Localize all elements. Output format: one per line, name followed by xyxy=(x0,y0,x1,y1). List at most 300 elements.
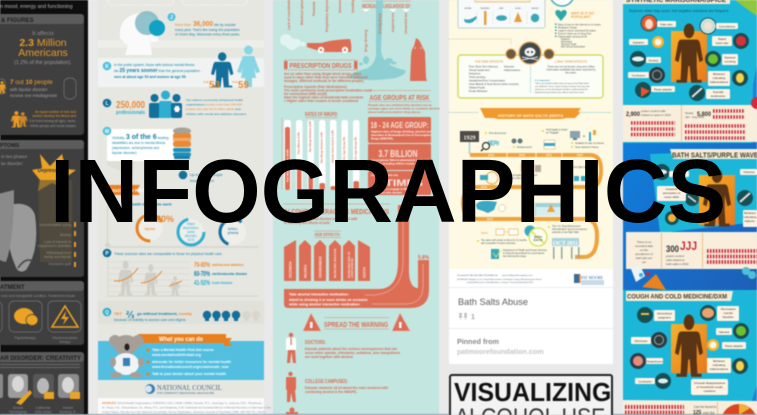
text: prescription description: dosages, different methods or for different people). xyxy=(284,79,364,83)
why is it so popular: Legal in some countries/US states xyxy=(558,30,597,32)
icon: lightning warning xyxy=(52,306,78,327)
stat P: comparison chart: heart disease xyxy=(212,281,233,285)
stat strip: spice calls: Jan - Aug 2011 xyxy=(685,115,705,119)
timeline lower items: ban banning the drugs. xyxy=(503,255,527,258)
stat L: professionals: Our nation's community behavioral health xyxy=(186,98,243,102)
stat N: treatment: Up to 80% of people xyxy=(190,173,223,177)
side effects box: Teeth grinding xyxy=(469,75,486,79)
stat strip: bath salt calls xyxy=(626,232,757,269)
symptom list: family and friends xyxy=(44,255,71,259)
stat J: suicide: More than xyxy=(175,23,191,27)
red phone icon rows xyxy=(631,111,746,138)
sources: United States. Results from the National Comorbidity Survey Replication. American Journal of Psychiatry 2008, 165:703-711 | World xyxy=(102,410,266,414)
why is it so popular: Shaved Head xyxy=(561,43,577,46)
symptom labels xyxy=(628,21,738,99)
symptom labels: indicating xyxy=(744,215,757,219)
icon: head with circles xyxy=(120,11,165,55)
side effect labels: INCREASED RISK OF xyxy=(347,251,351,278)
routes of use box: snort xyxy=(515,7,521,10)
side effect labels: LIVER DAMAGE xyxy=(350,258,354,278)
section: symptoms: re two phases xyxy=(1,154,27,159)
partial figure xyxy=(286,408,298,415)
rotated outcomes list: Impaired sex xyxy=(391,12,395,32)
icon: health workers xyxy=(149,90,182,118)
stat M: disabilities card xyxy=(103,127,191,178)
stat P: comparison chart: P xyxy=(105,251,109,257)
icon: spilled bottle xyxy=(631,265,756,290)
chart: rates of NMUPD: Non-Binge Drinkers 3.3% xyxy=(320,131,324,163)
portraits xyxy=(0,374,80,405)
side effects box: National Drug Institute note effects with their chem. xyxy=(535,91,585,94)
icon: smoke xyxy=(280,34,306,50)
chart: success rings: bipolar xyxy=(145,227,156,231)
routes of use box: smoke xyxy=(464,7,472,10)
timeline lower items: authority to ban Bath Salts xyxy=(552,231,580,234)
stat M: disabilities card: bipolar disorder) xyxy=(112,151,136,155)
symptom labels: indicating xyxy=(713,363,726,367)
stat Q: two thirds without treatment: ⅔ xyxy=(126,310,134,321)
side effect tabs xyxy=(284,240,370,281)
flow shape: alcohol medication stats: Admit to drinking 3 or more drinks on occasion xyxy=(289,298,368,302)
dotted connector xyxy=(449,39,511,45)
body figure with highlight xyxy=(671,315,707,377)
timeline lower items: BATH xyxy=(534,235,542,239)
chart: success rings xyxy=(105,205,258,248)
heading: spread the warning: SPREAD THE WARNING xyxy=(324,320,388,329)
symptom list: Excessive guilt xyxy=(49,262,71,266)
side effect labels: DROWSINESS xyxy=(318,256,322,278)
body figure with highlight xyxy=(671,23,707,83)
symptom labels: Confusion xyxy=(638,380,652,384)
timeline: history: 1919 xyxy=(488,153,495,157)
chart: success rings: Major xyxy=(187,222,196,226)
symptom labels: Pale skin xyxy=(660,22,673,26)
chart: success rings: schizo- xyxy=(228,227,238,231)
section: treatment: ronic and manageable condition. Treatments include: xyxy=(1,294,76,298)
stat strip: bath salt calls: bath salt use xyxy=(636,256,653,260)
chart: success rings: 80% xyxy=(156,214,174,224)
title: INFOGRAPHICS xyxy=(50,142,726,242)
section: symptoms: PTOMS xyxy=(0,143,20,149)
symptom labels: faculties xyxy=(722,315,734,319)
chart: rates of NMUPD: Past Misuse 8.9% xyxy=(296,132,300,154)
section: facts and figures: (1.2% of the population). xyxy=(14,60,72,66)
heading: increased likelihood: INCREASED LIKELIHOOD OF: xyxy=(362,4,411,10)
stat K: life expectancy band: K xyxy=(105,64,109,70)
rotated outcomes list: Unwanted sex xyxy=(404,12,408,34)
stat L: professionals: 250,000 xyxy=(116,100,145,111)
stat N: treatment: treated recover xyxy=(190,179,215,183)
stat K: life expectancy band: 53 xyxy=(209,80,220,91)
icon: clock xyxy=(550,0,574,6)
why is it so popular: POPULAR? xyxy=(571,15,591,19)
chart: success rings: phrenia xyxy=(228,231,239,235)
timeline: history: 2010 xyxy=(487,217,494,221)
section: facts and figures: Americans xyxy=(18,47,68,59)
stat K: life expectancy band: In the public system, those with serious mental illness xyxy=(114,63,195,67)
symptom labels xyxy=(657,169,757,227)
panel: bath salts abuse pin card xyxy=(449,0,613,364)
section: spice: Euphoric state may occur, but negative reactions are frequent: xyxy=(629,9,729,13)
side effect labels: DIZZINESS xyxy=(288,261,292,278)
section: spice xyxy=(623,0,757,143)
timeline: history xyxy=(460,128,604,259)
heading strip xyxy=(626,291,733,301)
icon: sad face mask xyxy=(7,204,36,272)
stat strip: spice calls: 2,900 xyxy=(626,111,640,118)
college campuses advice: combining alcohol & the NMUPD. xyxy=(305,390,357,394)
symptom labels: Behavior xyxy=(744,211,756,215)
sources: SOURCES | World Health Organization | SAMHSA | CDC | NAMI | NIMH | Kessler, R.C., Heeringa, S., Lakoma, M.D., Petukhova, xyxy=(102,401,262,405)
footer: provider and logo: Provided BY PAT MOORE FOUNDATION xyxy=(457,274,498,277)
section: facts and figures xyxy=(0,14,84,135)
symptom labels: hallucinations xyxy=(710,367,729,371)
text: prescription description: Have the highest rates of accidental fatal overdose xyxy=(284,96,364,100)
symptom list: Anxiety xyxy=(60,233,71,237)
section: creativity: Ernest xyxy=(13,406,23,410)
stat J: suicide: every year. That's like losing the population xyxy=(175,28,240,32)
stat strip: bath salt calls: calls related to xyxy=(666,258,685,262)
section: symptoms: lar disorder: xyxy=(1,161,23,166)
bottom edge line xyxy=(0,414,757,415)
stat strip: bath salt calls: poison control xyxy=(666,254,684,258)
icon: depressive phase star xyxy=(32,154,76,191)
footer: provider and logo: Institute/Research, Food/Nutrition, Listing in Tracking Identified 2011 xyxy=(467,281,534,284)
text: prescription description: used in ways other than they were intended (different xyxy=(284,76,368,80)
heading: alcohol interactive medications: ALCOHOL INTERACTIVE MEDICATIONS xyxy=(284,207,389,216)
text: age groups: abuse with prescription drug abuse. xyxy=(368,110,421,114)
banner: history of bath salts: HISTORY OF BATH SALTS (MEPH) xyxy=(498,113,564,118)
timeline items: Sold legally in Israel xyxy=(546,128,568,132)
side effects box: tolerance can be developed. Studies conducted by the xyxy=(535,88,588,91)
side effects box: Headaches/Poor Concentration xyxy=(469,78,506,82)
why is it so popular: Musicians xyxy=(561,40,573,44)
side effects box: Seizures xyxy=(504,64,515,68)
callout: 18-24 age group: Drugs (NMUPD). xyxy=(371,136,394,140)
symptom labels: medicine xyxy=(703,389,716,393)
timeline items: First discovered xyxy=(489,132,507,135)
logo: national council xyxy=(145,384,222,395)
panel: mental health infographic: health treatments work xyxy=(130,202,172,206)
timeline lower items: SALTS xyxy=(534,238,543,242)
stat P: comparison chart xyxy=(103,249,258,296)
callout: 3.7 billion: in 2009, including million rounds xyxy=(371,162,415,166)
college campuses advice: Educate students 18-24 about the risks involved with xyxy=(305,386,388,390)
symptom labels: tendencies xyxy=(711,94,726,98)
section: bath salts xyxy=(623,143,757,290)
symptom labels: judgment xyxy=(657,316,671,320)
stat M: disabilities card: M xyxy=(105,129,109,135)
symptom list: Withdrawal from xyxy=(46,251,71,255)
timeline lower items: The action will remain in effect for 12 months, xyxy=(481,239,528,242)
routes of use box xyxy=(458,0,545,28)
symptom labels: motor skills xyxy=(664,195,679,199)
symptom labels: hallucin. xyxy=(744,219,756,223)
side effects box: It is important: xyxy=(535,79,550,82)
doctors advice: occur when opioids, stimulants, sedatives, &/or tranquilizers xyxy=(305,351,400,355)
heading: age groups at risk: AGE GROUPS AT RISK xyxy=(370,93,430,102)
icon: spilling liquid xyxy=(349,0,406,80)
heading: alcohol interactive medications xyxy=(283,204,390,225)
side effect labels: NAUSEA xyxy=(304,264,308,278)
symptom labels: Diminished xyxy=(657,312,672,316)
symptom labels: Behavior xyxy=(713,359,725,363)
heading: prescription drugs: PRESCRIPTION DRUGS xyxy=(290,61,352,70)
timeline items xyxy=(476,128,604,216)
doctors advice: are used together with alcohol. xyxy=(305,355,354,359)
section: creativity: Catherine xyxy=(36,406,50,410)
pin title: Bath Salts Abuse xyxy=(458,297,528,307)
section: treatment: Electroconvulsive xyxy=(53,336,78,340)
action list: www.thenationalcouncil.org/cc/advocate_now xyxy=(151,365,229,369)
section: facts and figures: with bipolar disorder xyxy=(10,87,48,92)
symptom labels: Convulsions xyxy=(719,24,736,28)
side effects box: Erratic Behavior xyxy=(469,89,488,93)
panel: what you can do: What you can do xyxy=(159,336,203,343)
chart: rates of NMUPD: Past Binge Drinkers 39.8% xyxy=(286,149,290,182)
stat strip: spice calls: poison control calls xyxy=(641,109,666,113)
callout: 3 times xyxy=(368,171,431,195)
symptom labels xyxy=(631,306,746,395)
stat M: disabilities card: Globally, 3 of the 6 leading xyxy=(112,134,169,141)
stat J: suicide: of Green Bay, Wisconsin every three years. xyxy=(175,32,240,36)
stat J: suicide: die by suicide xyxy=(214,23,236,27)
stat strip: DXM: over the xyxy=(703,411,715,415)
routes of use box: oral xyxy=(499,7,503,10)
symptom list: enjoyment in activities xyxy=(38,244,71,248)
sources xyxy=(98,398,271,415)
panel: bipolar disorder dark infographic xyxy=(0,0,88,415)
side effects box: Poor Short Term Memory xyxy=(469,64,499,68)
side effects box xyxy=(458,55,603,98)
text: age groups: People who are initiated into alcohol use at xyxy=(368,103,431,107)
action list: Talk to your doctor about your mental health xyxy=(152,372,226,376)
symptom icons xyxy=(630,305,749,389)
intro line: n mood, energy and functioning xyxy=(0,4,73,10)
timeline lower items xyxy=(477,225,588,259)
side effects box: information available has been reported by xyxy=(546,68,596,72)
icon: speech bubbles xyxy=(14,308,38,326)
stat J: suicide: J xyxy=(170,15,173,21)
rotated outcomes list xyxy=(364,12,408,52)
banner xyxy=(138,334,232,346)
panel: prescription drugs infographic xyxy=(273,0,440,415)
chart: rates of NMUPD xyxy=(282,112,360,190)
section: creativity: Robert xyxy=(63,406,73,410)
side effect labels xyxy=(288,249,366,278)
callout: 18-24 age group: disorders & Nonmedical Use of Prescription xyxy=(371,133,432,137)
timeline: history: 1929 xyxy=(464,136,476,142)
symptom labels: mental xyxy=(723,311,733,315)
side effects box: LONG TERM EFFECTS xyxy=(555,60,587,64)
symptom labels: Panic attacks xyxy=(725,344,743,348)
timeline items: MEPH xyxy=(488,140,499,148)
timeline lower items: MDMA xyxy=(481,232,488,235)
timeline: history: 2003 xyxy=(519,153,526,157)
stat strip: bath salt calls: bath salts in 2010 xyxy=(666,262,689,266)
heading: age groups at risk xyxy=(368,90,431,102)
callout: 3.7 billion: prescriptions filled at pharmacies in the U.S xyxy=(371,158,429,162)
stat Q: two thirds without treatment: YET xyxy=(114,311,122,316)
symptom labels: indicating xyxy=(713,76,726,80)
heading: side effects: SIDE EFFECTS: xyxy=(314,232,341,237)
icon: koala mascot xyxy=(109,335,144,378)
text: prescription description: Prescription Opioids (Pain Medications): xyxy=(284,85,348,89)
stat L: professionals: L xyxy=(105,101,109,107)
stat M: disabilities card: disabilities are due to mental illness xyxy=(112,141,166,145)
section: facts and figures: ethnic groups and social classes xyxy=(30,124,76,128)
heading: increased likelihood xyxy=(362,1,411,12)
section: facts and figures: & FIGURES xyxy=(1,18,34,24)
section: cough and cold medicine xyxy=(623,290,757,415)
section: facts and figures: 2.3 Million xyxy=(19,37,67,49)
timeline lower items: with a possible 6 month extension xyxy=(481,242,516,245)
timeline lower items: is doing the groundwork for a permanent xyxy=(503,252,545,255)
symptom labels: Agitation xyxy=(633,40,645,44)
side effects box: Nose Bleeds & Nose Burns (when snorted) xyxy=(469,82,519,86)
symptom labels: perception of xyxy=(663,191,680,195)
icon: shadow cone xyxy=(38,180,72,262)
timeline items: Available for sale on internet xyxy=(575,142,604,145)
repin count: 1 xyxy=(471,314,475,321)
symptom list: Uncontrollable crying xyxy=(39,223,71,227)
chart: rates of NMUPD: Abstain from Alcohol 1.9% xyxy=(330,130,334,163)
doctors advice: Educate patients about the serious consequences that can xyxy=(305,347,397,351)
heading: alcohol interactive medications: or intensify the effects of both. xyxy=(284,221,331,225)
why is it so popular: Easy to buy on the internet or in stores xyxy=(558,24,602,26)
section: facts and figures: receive one misdiagnosis xyxy=(10,93,57,98)
stat strip: bath salt calls: There is no xyxy=(637,240,652,244)
repin count xyxy=(458,313,475,321)
stat N: treatment xyxy=(179,171,223,183)
routes of use box: rectum xyxy=(531,7,539,10)
callout: 18-24 age group: Highest rates of binge drinking, alcohol use xyxy=(371,130,431,134)
stat J: suicide xyxy=(168,13,240,36)
footer: provider and logo: SOURCES: Wagner et al. | Drug Enforcement | Schedule Listing | Monitoring the Future xyxy=(457,278,543,281)
side effects box: Visual Impairment xyxy=(469,68,490,72)
panel: synthetic drugs infographic xyxy=(623,0,757,415)
symptom labels: Anxiety xyxy=(649,58,659,62)
rotated outcomes list: Driving drunk xyxy=(378,13,382,34)
section: symptoms: Depressive xyxy=(38,168,65,174)
timeline items: Sold online xyxy=(477,195,489,197)
stat strip: bath salt calls: on the xyxy=(640,248,648,252)
section: facts and figures: it is found among all ages, races, xyxy=(29,119,76,123)
heading: side effects xyxy=(314,231,341,238)
text: prescription description xyxy=(284,72,372,103)
chart: success rings: OCD xyxy=(187,238,195,242)
side effects box: Hallucinations xyxy=(504,68,521,72)
flow shape: alcohol medication stats xyxy=(284,205,430,308)
panel: mental health infographic: SUCCESS RATES xyxy=(112,188,150,193)
stat K: life expectancy band xyxy=(98,46,264,91)
stat strip: bath salt calls: yet xyxy=(642,260,646,264)
callout: 3 times: than those who abstain xyxy=(371,190,402,194)
callout: 3 times: more likely to engage in NMUPD xyxy=(371,187,414,191)
stat P: comparison chart: asthma and diabetes xyxy=(212,263,244,267)
action list xyxy=(146,348,231,376)
college campuses advice xyxy=(286,372,388,402)
section: facts and figures: women develop the illness and xyxy=(32,114,76,118)
dashed pills xyxy=(108,0,247,5)
section: facts and figures: An equal number of men and xyxy=(35,110,76,114)
why is it so popular: Relatively Cheap xyxy=(558,26,578,30)
footer: provider and logo xyxy=(457,274,604,285)
callout: 18-24 age group: 18 - 24 AGE GROUP: xyxy=(370,121,428,130)
college campuses advice: COLLEGE CAMPUSES: xyxy=(305,379,348,385)
stat strip: bath salt calls: recorded data xyxy=(635,244,653,248)
action list: www.mentalhealthfirstaid.org xyxy=(151,353,201,357)
section: creativity: AR DISORDER: CREATIVITY xyxy=(0,356,81,362)
text: prescription description: = Higher rates than cocaine & heroin combined. xyxy=(284,99,359,103)
symptom labels: heart rate xyxy=(716,41,729,45)
symptom labels: Confusion xyxy=(632,74,646,78)
panel: visualizing alcohol use card xyxy=(448,373,614,415)
why is it so popular: Fashionable among 18-25 xyxy=(558,36,588,38)
timeline items: Rediscovered xyxy=(517,146,532,149)
chart: success rings: disorder, xyxy=(185,234,197,238)
timeline items: Used for Bath Salts & xyxy=(569,166,591,169)
timeline items: sold online in UK 2009 xyxy=(510,178,534,180)
why is it so popular xyxy=(555,10,602,48)
timeline lower items: The U.S. Drug Enforcement xyxy=(552,225,581,228)
stat K: life expectancy band: men at about age 53 and women at age 59 xyxy=(114,75,186,79)
footer: provider and logo: PAT MOORE xyxy=(581,275,604,280)
rotated outcomes list: Binge drinking xyxy=(364,30,368,52)
stat strip: DXM: Can be found in xyxy=(694,405,716,409)
symptom labels: Rapid xyxy=(718,37,726,41)
side effects box: Dilated Pupils xyxy=(469,86,486,90)
symptom icons xyxy=(630,15,749,101)
heading: prescription drugs xyxy=(284,60,358,70)
symptom list xyxy=(38,223,72,266)
light band xyxy=(98,40,264,48)
symptom labels: of household cough xyxy=(696,385,723,389)
callout: 18-24 age group xyxy=(368,117,432,143)
symptom labels: Suicidal xyxy=(713,90,724,94)
chart: rates of NMUPD: 12+ Age Group 4% xyxy=(354,136,358,160)
chart: success rings: depressive, xyxy=(183,226,199,230)
why is it so popular: Mid School Education xyxy=(561,46,586,48)
why is it so popular: Doesn't show up on Drug Test xyxy=(558,32,592,36)
stat K: life expectancy band: 59 xyxy=(238,80,249,91)
flow shape: alcohol medication stats: while using alcohol interactive medication: xyxy=(288,302,360,306)
stat strip: spice calls xyxy=(623,105,757,142)
action list: Advocate for better resources for mental health xyxy=(152,360,231,364)
symptom labels: hallucinations xyxy=(710,80,729,84)
side effect labels: INCREASED SEDATION xyxy=(333,249,337,278)
section: creativity xyxy=(0,352,84,415)
text: prescription description: Are no safer than using illegal street drugs, when xyxy=(284,72,361,76)
section: creativity: Zeta-Jones xyxy=(35,410,52,414)
symptom labels: vomiting xyxy=(724,60,736,64)
stat P: comparison chart: 70-80% xyxy=(194,262,211,269)
stat strip: bath salt calls: 300 xyxy=(666,244,679,254)
logo: national council: NATIONAL COUNCIL xyxy=(157,385,222,392)
action list: Take a Mental Health First Aid course xyxy=(152,348,214,352)
chart: rates of NMUPD: 12+ Age Group 4% xyxy=(342,136,346,160)
callout: 3 times: 3 TIMES xyxy=(375,178,423,189)
side effects box: are addictive. Users report strong cravings that may and xyxy=(535,85,590,88)
side effects box: the users. xyxy=(565,70,577,74)
stat strip: DXM xyxy=(623,400,757,415)
text: age groups: younger ages are more likely to combine alcohol xyxy=(368,106,440,110)
rotated risks list: Paranoia xyxy=(312,2,316,16)
timeline track xyxy=(463,155,601,257)
route icons xyxy=(464,11,539,25)
icon: layered disks xyxy=(173,128,191,159)
symptom labels: Nausea xyxy=(719,330,730,334)
